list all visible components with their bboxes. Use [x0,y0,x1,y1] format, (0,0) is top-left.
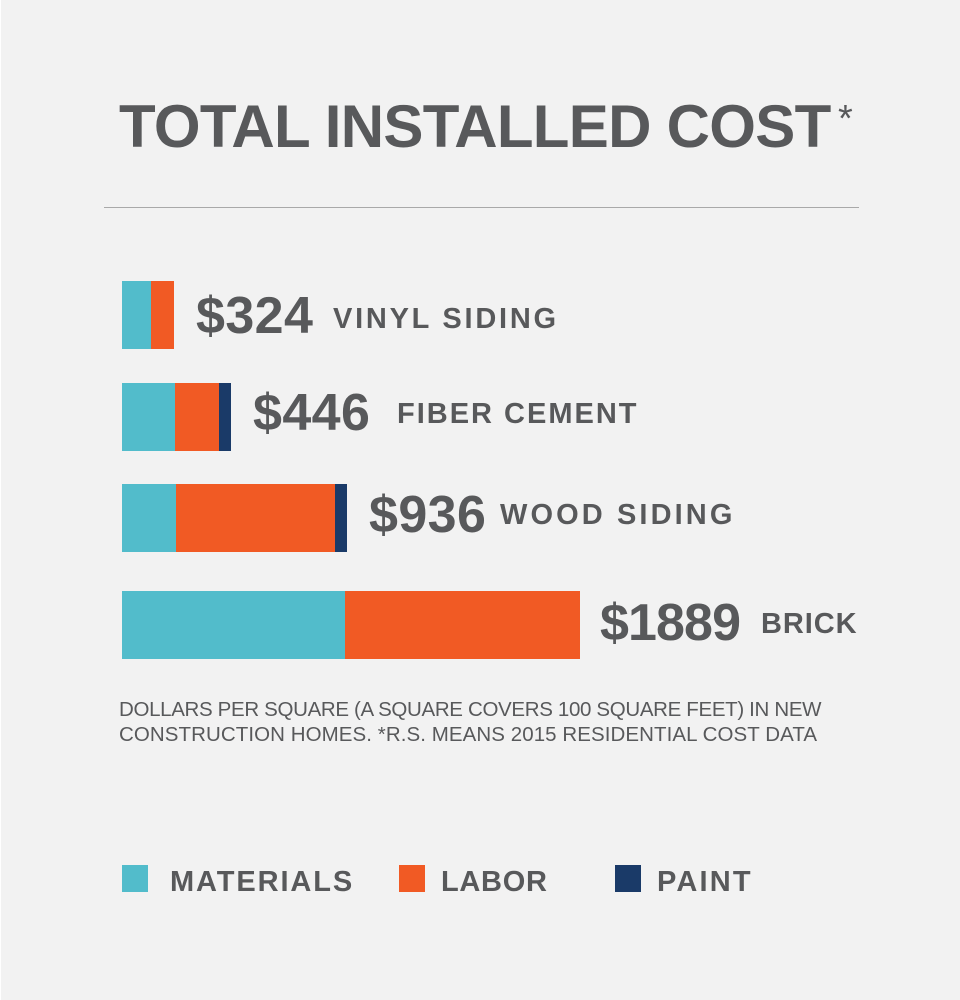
value: fiber cement: $446 [253,384,370,442]
materials segment [122,591,345,659]
label: wood siding: WOOD SIDING [500,499,736,531]
title asterisk: * [838,98,853,140]
label: fiber cement: FIBER CEMENT [397,398,638,430]
value: wood siding: $936 [369,486,486,544]
paint segment [219,383,231,451]
footnote: DOLLARS PER SQUARE (A SQUARE COVERS 100 SQUARE FEET) IN NEW [119,698,821,721]
footnote [119,698,822,746]
footnote: CONSTRUCTION HOMES. *R.S. MEANS 2015 RESIDENTIAL COST DATA [119,723,817,746]
bar: vinyl siding [122,281,174,349]
materials segment [122,484,176,552]
label: vinyl siding: VINYL SIDING [333,303,559,335]
legend label: paint: PAINT [657,866,753,898]
materials segment [122,281,151,349]
legend swatch: paint [614,865,641,892]
legend label: labor: LABOR [441,866,548,898]
label: brick: BRICK [761,608,858,640]
legend label: materials: MATERIALS [170,866,354,898]
bar: fiber cement [122,383,231,451]
bar: brick [122,591,580,659]
value: brick: $1889 [600,594,740,652]
legend [122,865,753,898]
paint segment [335,484,347,552]
bar: wood siding [122,484,347,552]
value: vinyl siding: $324 [196,287,313,345]
title: TOTAL INSTALLED COST [119,93,831,160]
legend swatch: labor [398,865,425,892]
legend swatch: materials [122,865,148,892]
materials segment [122,383,175,451]
